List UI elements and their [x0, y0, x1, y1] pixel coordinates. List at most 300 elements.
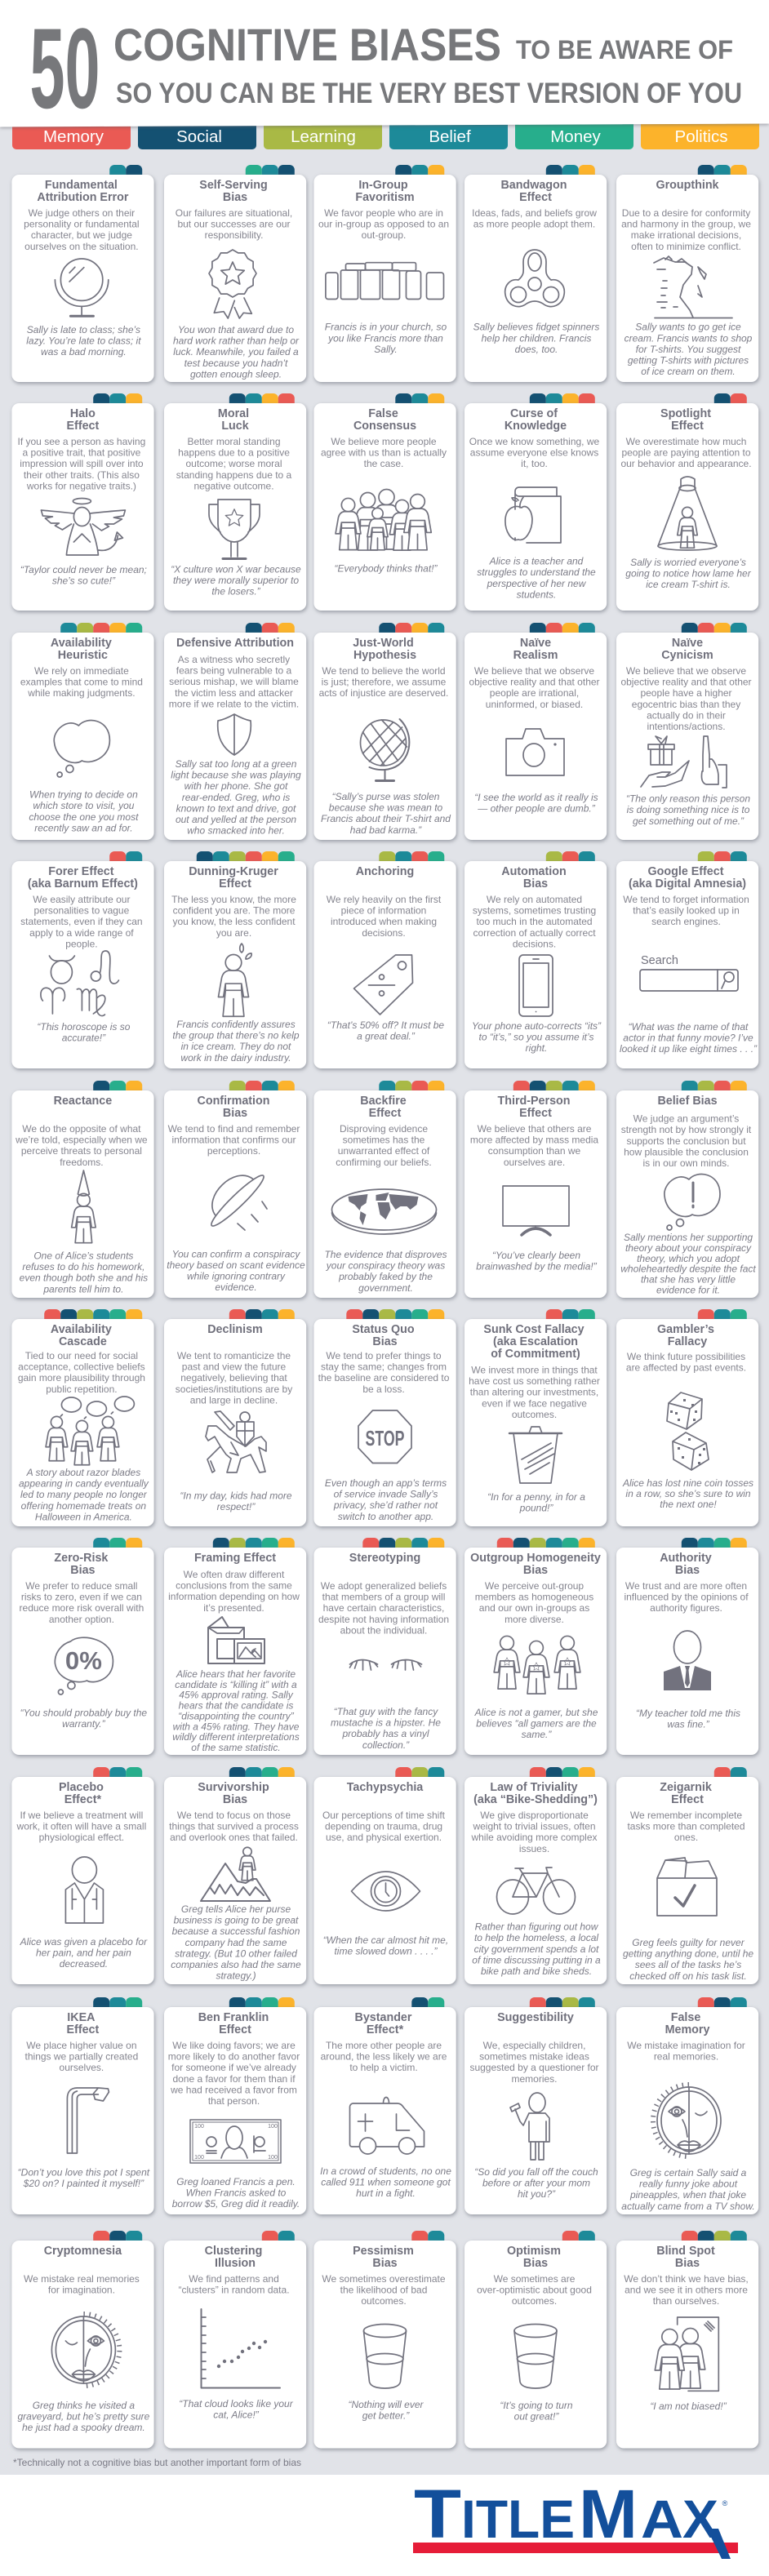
card: Just-World Hypothesis: Francis about their T-shirt and [321, 813, 451, 824]
card: Fundamental Attribution Error [11, 165, 154, 382]
card: Just-World Hypothesis: because she was mean to [329, 802, 443, 814]
card: Outgroup Homogeneity Bias: same.” [522, 1729, 552, 1740]
card: Automation Bias [465, 851, 607, 1068]
card: Curse of Knowledge: Once we know something, we [469, 436, 600, 447]
card: Status Quo Bias: Status Quo [352, 1323, 415, 1336]
card: Tachypsychia: use, and physical exertion. [326, 1832, 442, 1843]
card: Bystander Effect: In a crowd of students, no one [320, 2165, 451, 2177]
card: Dunning-Kruger Effect: you know, the less confident [172, 916, 296, 927]
card: Anchoring: We rely heavily on the first [327, 894, 442, 905]
card: Self-Serving Bias: Bias [223, 191, 247, 204]
card: Tachypsychia: Our perceptions of time shift [322, 1810, 446, 1821]
card: Groupthink: for T-shirts. You suggest [636, 344, 741, 355]
card: Outgroup Homogeneity Bias: Bias [523, 1564, 548, 1577]
card: False Memory: actually came from a TV show. [621, 2201, 755, 2212]
card: Third-Person Effect: brainwashed by the media!” [476, 1261, 598, 1272]
card: Framing Effect [164, 1538, 306, 1755]
card: Self-Serving Bias: luck. Meanwhile, you failed a [173, 346, 299, 358]
card: Status Quo Bias: privacy, she’d rather not [333, 1499, 438, 1511]
card: Naïve Realism: We believe that we observe [474, 665, 594, 677]
card: Naïve Realism: “I see the world as it really is [474, 792, 598, 803]
card: Pessimism Bias: “Nothing will ever [348, 2399, 425, 2410]
card: Tachypsychia: time slowed down . . . .” [334, 1946, 438, 1957]
card: Google Effect: search engines. [651, 916, 721, 927]
card: Just-World Hypothesis: is just; therefore, we assume [322, 677, 447, 688]
card: Naïve Cynicism: people have a higher [640, 687, 732, 699]
card: Clustering Illusion [164, 2231, 306, 2449]
card: Status Quo Bias [313, 1309, 456, 1526]
card: Declinism: “In my day, kids had more [180, 1490, 292, 1501]
logo: TitleMax: ® [722, 2499, 728, 2507]
card: Third-Person Effect: We believe that others are [478, 1123, 592, 1135]
card: Clustering Illusion: Illusion [215, 2257, 256, 2270]
card: Belief Bias: theory, which you adopt [637, 1253, 740, 1264]
card: Backfire Effect: Backfire [360, 1095, 407, 1108]
card: Framing Effect: wildly different interpretations [172, 1731, 300, 1743]
card: Zeigarnik Effect: ones. [674, 1832, 698, 1843]
card: Optimism Bias [465, 2231, 607, 2449]
card: Availability Heuristic: which store to visit, you [33, 800, 135, 811]
card: Cryptomnesia: graveyard, but he’s pretty sure [17, 2411, 150, 2423]
card: Ben Franklin Effect: 100 [268, 2155, 278, 2161]
card: Zero-Risk Bias: “You should probably buy the [20, 1708, 147, 1719]
card: Availability Heuristic: We rely on immediate [34, 665, 129, 677]
card: In-Group Favoritism: In-Group [358, 179, 408, 192]
card: Anchoring: Anchoring [356, 865, 414, 878]
card: Bystander Effect: to help a victim. [349, 2062, 418, 2073]
card: Availability Cascade: Tied to our need for social [25, 1350, 138, 1361]
card: Automation Bias: correction of actually correct [473, 927, 596, 939]
card: Halo Effect: a positive trait, that positive [23, 447, 141, 459]
card: Defensive Attribution: the victim less and attacker [175, 687, 293, 699]
card: Defensive Attribution [164, 623, 306, 840]
card: Automation Bias: systems, sometimes trusting [473, 905, 596, 917]
card: Cryptomnesia: Greg thinks he visited a [33, 2400, 135, 2411]
card: Stereotyping: have certain characteristics, [323, 1602, 444, 1614]
card: Law of Triviality: weight to trivial issues, often [472, 1821, 596, 1832]
card: Curse of Knowledge: Knowledge [505, 420, 567, 433]
card: Cryptomnesia [11, 2231, 154, 2449]
card: Self-Serving Bias: responsibility. [205, 229, 263, 241]
card: Availability Heuristic: Availability [51, 637, 112, 650]
card: Moral Luck: Luck [221, 420, 249, 433]
card: Status Quo Bias: be a loss. [362, 1383, 405, 1395]
card: Backfire Effect: sometimes has the [343, 1135, 425, 1146]
card: Reactance: we’re told, especially when we [15, 1135, 148, 1146]
card: Naïve Cynicism: egocentric bias than they [632, 699, 740, 710]
card: Defensive Attribution: light because she was playing [171, 770, 301, 781]
card: Pessimism Bias: We sometimes overestimate [322, 2273, 446, 2285]
card: Third-Person Effect: Effect [519, 1107, 552, 1120]
card: Self-Serving Bias: hard work rather than help or [173, 335, 300, 347]
card: Dunning-Kruger Effect: the group that there’s no kelp [172, 1030, 300, 1042]
card: Belief Bias: how plausible the conclusion [624, 1146, 749, 1157]
card: Automation Bias: to “it’s,” so you assume it’s [479, 1032, 593, 1043]
card: Curse of Knowledge: Curse of [510, 407, 558, 420]
card: Naïve Cynicism: intentions/actions. [647, 721, 726, 732]
card: Moral Luck: happens due to a positive [178, 447, 290, 459]
card: Groupthink: Sally wants to go get ice [635, 322, 741, 333]
card: Availability Heuristic: recently saw an ad for. [34, 822, 133, 833]
card: Naïve Cynicism [616, 623, 758, 840]
card: Authority Bias: Authority [660, 1552, 712, 1565]
card: Dunning-Kruger Effect: confident you are. The more [173, 905, 296, 917]
card: Availability Cascade: gain more plausibility through [18, 1372, 145, 1383]
card: Authority Bias: influenced by the opinions of [624, 1592, 749, 1603]
card: Bystander Effect: The more other people are [326, 2040, 442, 2051]
card: Automation Bias: right. [526, 1042, 547, 1054]
card: Availability Cascade [11, 1309, 154, 1526]
card: Sunk Cost Fallacy: pound!” [519, 1503, 553, 1514]
header panel: TO BE AWARE OF [516, 35, 733, 64]
card: Dunning-Kruger Effect: work in the dairy industry. [180, 1052, 291, 1064]
card: Self-Serving Bias: but our successes are our [177, 219, 291, 230]
card: Ben Franklin Effect: Greg loaned Francis a pen. [176, 2176, 296, 2187]
card: Gambler's Fallacy: We think future possibilities [627, 1351, 745, 1362]
card: Availability Heuristic: choose the one you most [29, 811, 139, 823]
card: Fundamental Attribution Error: Fundamental [45, 179, 118, 192]
card: Defensive Attribution: Sally sat too long at a green [176, 758, 297, 770]
card: Halo Effect: “Taylor could never be mean; [20, 564, 147, 575]
card: Backfire Effect: government. [358, 1282, 413, 1294]
card: IKEA Effect: things we partially created [25, 2051, 138, 2063]
card: Stereotyping: Stereotyping [349, 1552, 420, 1565]
card: Law of Triviality: city government spends a lot [474, 1943, 599, 1955]
card: Law of Triviality: Rather than figuring out how [475, 1921, 599, 1933]
card: Zeigarnik Effect: getting anything done, until he [623, 1948, 753, 1960]
card: Third-Person Effect: Third-Person [498, 1095, 570, 1108]
card: Sunk Cost Fallacy: than altering our investments, [470, 1387, 598, 1398]
card: Law of Triviality: to help the homeless, a local [474, 1932, 598, 1943]
card: Halo Effect: Effect [67, 420, 99, 433]
card: Naïve Realism [465, 623, 607, 840]
card: IKEA Effect [11, 1997, 154, 2214]
card: Availability Cascade: A story about razor blades [26, 1467, 140, 1478]
card: Bystander Effect: hurt in a fight. [356, 2187, 416, 2199]
card: Ben Franklin Effect: When Francis asked to [186, 2187, 287, 2199]
card: Survivorship Bias: business is going to be great [174, 1915, 299, 1926]
card: Placebo Effect [11, 1767, 154, 1984]
card: Stereotyping: mustache is a hipster. He [331, 1717, 441, 1729]
card: Backfire Effect: unwarranted effect of [338, 1145, 430, 1157]
card: Blind Spot Bias: Bias [675, 2257, 700, 2270]
card: In-Group Favoritism: Francis is in your church, so [325, 322, 447, 333]
card: Authority Bias: Bias [675, 1564, 700, 1577]
card: Suggestibility: before or after your mom [482, 2178, 590, 2189]
card: Blind Spot Bias: and we see it in others more [625, 2285, 748, 2296]
card: Gambler's Fallacy: Alice has lost nine coin tosses [622, 1477, 753, 1489]
card: Framing Effect: of the same statistic. [191, 1742, 281, 1753]
card: Pessimism Bias: outcomes. [361, 2295, 407, 2307]
card: Tachypsychia: depending on trauma, drug [325, 1821, 442, 1832]
card: Halo Effect: If you see a person as having [18, 436, 145, 447]
card: IKEA Effect: IKEA [67, 2011, 95, 2024]
card: Just-World Hypothesis: Hypothesis [353, 649, 416, 662]
card: Self-Serving Bias: gotten enough sleep. [190, 368, 282, 380]
card: Zeigarnik Effect: Effect [671, 1793, 704, 1806]
card: Suggestibility: Suggestibility [497, 2011, 574, 2024]
card: In-Group Favoritism: We favor people who are in [324, 207, 443, 219]
card: Ben Franklin Effect: 100 [194, 2155, 204, 2161]
card: Sunk Cost Fallacy: We invest more in things that [471, 1365, 598, 1376]
card: Stereotyping: “That guy with the fancy [334, 1706, 438, 1717]
card: Backfire Effect: The evidence that disproves [324, 1249, 447, 1260]
card: Google Effect: “What was the name of that [629, 1021, 749, 1033]
card: Framing Effect: Alice hears that her favorite [176, 1668, 296, 1680]
card: IKEA Effect: “Don’t you love this pot I spent [18, 2166, 150, 2178]
card: Automation Bias: decisions. [513, 938, 556, 949]
card: Survivorship Bias: Bias [223, 1793, 247, 1806]
card: Backfire Effect: probably faked by the [338, 1271, 433, 1282]
card: Authority Bias: was fine.” [667, 1719, 710, 1730]
card: Groupthink: Due to a desire for conformity [622, 207, 750, 219]
card: Forer Effect: accurate!” [62, 1033, 106, 1044]
card: Belief Bias: strength not by how strongly it [621, 1124, 752, 1135]
footnote: *Technically not a cognitive bias but another important form of bias [13, 2457, 301, 2468]
card: Sunk Cost Fallacy: Sunk Cost Fallacy [483, 1323, 585, 1336]
card: Law of Triviality: bike path and bike sheds. [481, 1965, 592, 1977]
card: Fundamental Attribution Error: We judge others on their [29, 207, 135, 219]
card: Clustering Illusion: We find patterns and [189, 2273, 279, 2285]
card: Outgroup Homogeneity Bias: more diverse. [505, 1614, 564, 1625]
card: Availability Cascade: Availability [51, 1323, 112, 1336]
card: IKEA Effect: We place higher value on [26, 2040, 137, 2051]
card: Naïve Cynicism: actually do in their [647, 709, 726, 721]
card: Third-Person Effect: ourselves are. [504, 1157, 565, 1168]
card: Blind Spot Bias: “I am not biased!” [650, 2401, 727, 2412]
card: Confirmation Bias [164, 1081, 306, 1298]
card: Fundamental Attribution Error: character, but we judge [31, 229, 132, 241]
card: Forer Effect [11, 851, 154, 1068]
card: Availability Heuristic [11, 623, 154, 840]
card: Defensive Attribution: who smacked into her. [187, 825, 285, 837]
card: Bandwagon Effect: Effect [519, 191, 552, 204]
card: Law of Triviality: of time discussing putting in a [472, 1954, 601, 1965]
card: Spotlight Effect: our behavior and appearance. [620, 458, 752, 469]
card: Bystander Effect: Effect* [367, 2023, 404, 2036]
card: Framing Effect: hears that the candidate is [179, 1700, 293, 1712]
card: Status Quo Bias: of service invade Sally’s [334, 1489, 438, 1500]
card: Anchoring: “That’s 50% off? It must be [327, 1019, 444, 1031]
card: Third-Person Effect: consumption than we [488, 1145, 581, 1157]
card: IKEA Effect: Effect [67, 2023, 99, 2036]
card: Ben Franklin Effect: we had received a favor from [170, 2084, 297, 2095]
card: Groupthink: of ice cream on them. [641, 366, 736, 377]
card: Naïve Cynicism: get something out of me.” [633, 815, 745, 827]
card: Declinism: negatively, believing that [180, 1372, 287, 1383]
legend: categories: Politics [675, 127, 727, 146]
card: Forer Effect: “This horoscope is so [37, 1021, 131, 1033]
card: Ben Franklin Effect: 100 [268, 2124, 278, 2130]
card: Placebo Effect: Effect* [64, 1793, 101, 1806]
card: Sunk Cost Fallacy: outcomes. [512, 1409, 557, 1420]
card: Blind Spot Bias [616, 2231, 758, 2449]
logo: TitleMax: A [641, 2489, 683, 2549]
card: Survivorship Bias: Survivorship [198, 1781, 269, 1794]
card: Declinism: societies/institutions are by [176, 1383, 292, 1395]
card: Declinism [164, 1309, 306, 1526]
card: Reactance [11, 1081, 154, 1298]
card: Cryptomnesia: he just had a spooky dream. [22, 2422, 145, 2433]
card: Backfire Effect [313, 1081, 456, 1298]
card: Naïve Cynicism: is doing something nice is to [627, 804, 750, 815]
card: Halo Effect: she’s so cute!” [52, 575, 116, 587]
card: Sunk Cost Fallacy: of Commitment) [491, 1348, 580, 1361]
card: Reactance: freedoms. [60, 1157, 104, 1168]
card: Authority Bias: authority figures. [650, 1602, 722, 1614]
card: Automation Bias: Your phone auto-corrects “its” [472, 1020, 602, 1032]
card: Spotlight Effect: people are paying attention to [621, 447, 751, 459]
card: Moral Luck [164, 393, 306, 611]
card: Curse of Knowledge: assume everyone else knows [470, 447, 598, 459]
card: Optimism Bias: Optimism [507, 2245, 561, 2258]
card: Availability Heuristic: When trying to decide on [29, 789, 138, 801]
logo: TitleMax: T [414, 2476, 461, 2552]
card: Automation Bias: Bias [523, 877, 548, 890]
card: Tachypsychia [313, 1767, 456, 1984]
card: Curse of Knowledge: students. [517, 588, 556, 600]
card: Reactance: refuses to do his homework, [22, 1261, 144, 1272]
card: Framing Effect: candidate is “killing it” with a [175, 1679, 297, 1690]
card: Groupthink [616, 165, 758, 382]
card: Defensive Attribution: rear-ended. Greg, who is [182, 792, 290, 803]
card: Clustering Illusion: “clusters” in random data. [178, 2285, 290, 2296]
header panel: COGNITIVE BIASES [113, 19, 501, 70]
card: Belief Bias: We judge an argument’s [633, 1113, 739, 1125]
card: False Consensus: Consensus [353, 420, 416, 433]
card: Availability Cascade: Halloween in America. [35, 1511, 132, 1522]
card: Bandwagon Effect [465, 165, 607, 382]
card: Just-World Hypothesis: “Sally’s purse was stolen [332, 791, 440, 802]
card: IKEA Effect: $20 on? I painted it myself!” [23, 2178, 144, 2189]
card: Reactance: even though both she and his [20, 1272, 148, 1284]
card: Google Effect: that’s easily looked up in [633, 905, 740, 917]
card: Law of Triviality: issues. [519, 1843, 549, 1854]
card: Google Effect: actor in that funny movie? I’ve [623, 1033, 753, 1044]
card: Gambler's Fallacy: in a row, so she’s sure to win [625, 1488, 751, 1499]
card: Belief Bias: supports the conclusion but [626, 1135, 746, 1147]
card: Just-World Hypothesis: acts of injustice are deserved. [319, 687, 448, 699]
card: Clustering Illusion: Clustering [205, 2245, 262, 2258]
card: Groupthink: make irrational decisions, [631, 229, 741, 241]
card: Placebo Effect: work, it often will have a small [16, 1821, 146, 1832]
card: Gambler's Fallacy [616, 1309, 758, 1526]
card: False Memory: real memories. [654, 2051, 718, 2063]
card: Naïve Realism: uninformed, or biased. [486, 699, 583, 710]
card: Dunning-Kruger Effect: Effect [219, 877, 251, 890]
card: Survivorship Bias: and overlook ones that failed. [170, 1832, 298, 1843]
card: Placebo Effect: physiological effect. [39, 1832, 124, 1843]
card: Declinism: Declinism [207, 1323, 263, 1336]
card: Fundamental Attribution Error: personality or fundamental [24, 219, 140, 230]
card: Backfire Effect: Effect [369, 1107, 402, 1120]
card: Optimism Bias: outcomes. [512, 2295, 557, 2307]
card: Bandwagon Effect: does, too. [515, 344, 558, 355]
card: Third-Person Effect [465, 1081, 607, 1298]
card: Naïve Cynicism: objective reality and that other [620, 677, 752, 688]
card: Ben Franklin Effect: borrow $5, Greg did it readily. [172, 2198, 300, 2210]
card: Availability Cascade: offering homemade treats on [21, 1500, 146, 1512]
card: IKEA Effect: ourselves. [60, 2062, 104, 2073]
card: Suggestibility: We, especially children, [483, 2040, 585, 2051]
card: Availability Cascade: Cascade [59, 1335, 107, 1348]
legend: categories: Memory [43, 127, 104, 146]
card: Zeigarnik Effect: tasks more than completed [627, 1821, 745, 1832]
card: Suggestibility: sometimes mistake ideas [479, 2051, 589, 2063]
card: Framing Effect: conclusions from the same [176, 1580, 292, 1592]
card: Zero-Risk Bias: Zero-Risk [54, 1552, 108, 1565]
card: Belief Bias: Sally mentions her supporting [624, 1232, 753, 1243]
card: Ben Franklin Effect: We like doing favors; we are [172, 2040, 296, 2051]
card: Curse of Knowledge: perspective of her new [487, 578, 587, 589]
card: Defensive Attribution: serious mishap, we will blame [169, 676, 299, 687]
card: False Memory: False [671, 2011, 700, 2024]
card: Dunning-Kruger Effect: Francis confidently assures [176, 1019, 296, 1030]
card: Spotlight Effect: Effect [671, 420, 704, 433]
card: Status Quo Bias: We tend to prefer things to [326, 1350, 442, 1361]
card: Zero-Risk Bias [11, 1538, 154, 1755]
card: Naïve Cynicism: “The only reason this person [626, 793, 750, 805]
card: Pessimism Bias: Pessimism [353, 2245, 414, 2258]
card: Third-Person Effect: “You’ve clearly been [492, 1250, 580, 1261]
legend: categories [12, 114, 759, 149]
card: Groupthink: getting T-shirts with pictures [628, 354, 749, 366]
card: Suggestibility [465, 1997, 607, 2214]
card: False Consensus: False [368, 407, 398, 420]
card: In-Group Favoritism: our in-group as opposed to an [318, 219, 449, 230]
card: Stereotyping: about the individual. [340, 1624, 427, 1636]
card: Halo Effect: works for negative traits.) [26, 480, 136, 491]
card: Automation Bias: We rely on automated [487, 894, 582, 905]
card: Defensive Attribution: fears being vulnerable to a [176, 665, 292, 677]
card: Belief Bias: is in our own minds. [642, 1157, 730, 1169]
card: Survivorship Bias: Greg tells Alice her purse [181, 1903, 291, 1915]
card: Blind Spot Bias: than ourselves. [653, 2295, 719, 2307]
card: Third-Person Effect: more affected by mass media [470, 1135, 598, 1146]
card: Zeigarnik Effect: Greg feels guilty for never [632, 1937, 745, 1948]
card: Belief Bias: that she has very little [641, 1274, 736, 1286]
card: Authority Bias: “My teacher told me this [636, 1708, 740, 1719]
card: Zeigarnik Effect: We remember incomplete [630, 1810, 742, 1821]
card: Survivorship Bias: companies also had the same [171, 1959, 301, 1970]
legend: categories: Learning [291, 127, 356, 146]
card: Self-Serving Bias: Our failures are situational, [176, 207, 292, 219]
card: Fundamental Attribution Error: was a bad morning. [41, 346, 127, 358]
card: Reactance: Reactance [54, 1095, 112, 1108]
card: Optimism Bias: out great!” [514, 2411, 559, 2423]
card: Cryptomnesia: for imagination. [48, 2285, 115, 2296]
logo: TitleMax: M [579, 2476, 638, 2552]
card: Framing Effect: with a 45% rating. They have [173, 1721, 300, 1732]
card: Self-Serving Bias: test because you hadn’t [184, 358, 288, 369]
card: Google Effect: looked it up like eight times . . .” [620, 1043, 758, 1055]
card: In-Group Favoritism [313, 165, 456, 382]
card: Law of Triviality [465, 1767, 607, 1984]
card: Defensive Attribution: known to text and drive, got [176, 802, 296, 814]
card: Zero-Risk Bias: We prefer to reduce small [25, 1580, 137, 1592]
card: Outgroup Homogeneity Bias: believes “all gamers are the [476, 1718, 597, 1730]
card: Fundamental Attribution Error: Attribution Error [37, 191, 129, 204]
card: Google Effect: Search [641, 954, 678, 967]
card: Framing Effect: it’s presented. [203, 1602, 264, 1614]
card: Curse of Knowledge: struggles to understand the [477, 566, 596, 578]
card: Defensive Attribution: more if we relate to the victim. [169, 698, 299, 709]
card: Ben Franklin Effect: that person. [208, 2095, 260, 2107]
card: Cryptomnesia: Cryptomnesia [44, 2245, 122, 2258]
card: False Memory: Memory [665, 2023, 709, 2036]
card: Pessimism Bias [313, 2231, 456, 2449]
card: Declinism: past and view the future [182, 1361, 287, 1373]
